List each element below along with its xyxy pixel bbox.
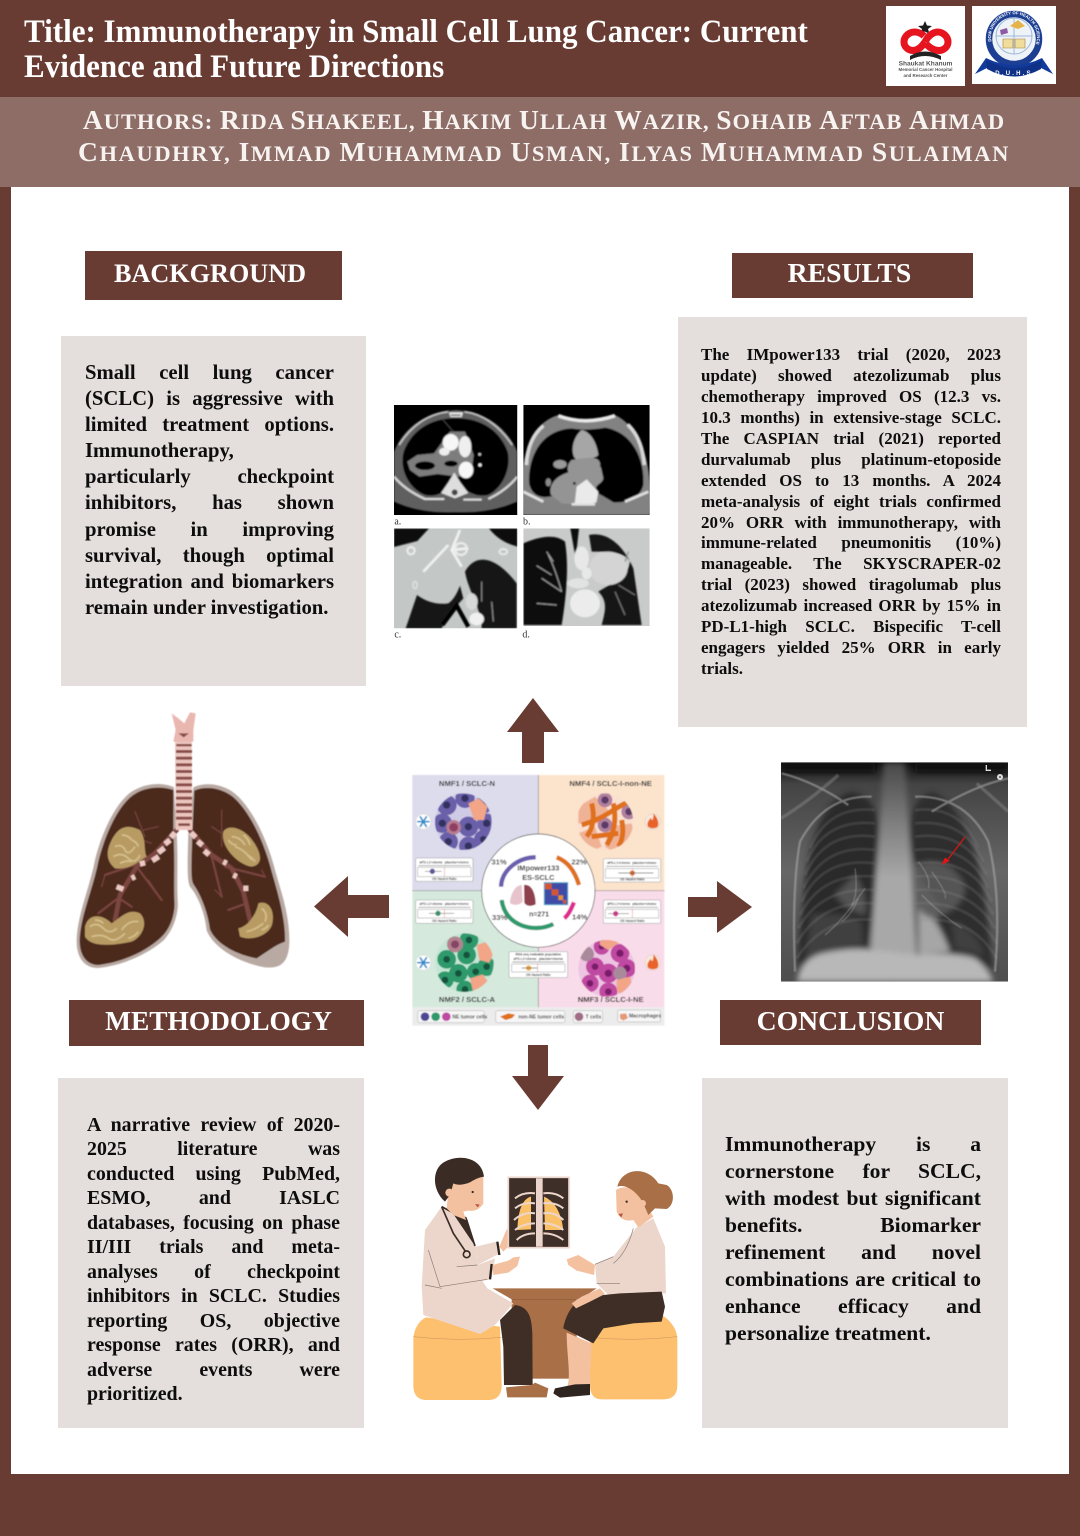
panel: methodology text: conducted using PubMed, [87,1163,340,1185]
panel: results text: trials. [701,659,743,678]
panel: background text: Immunotherapy, [85,440,234,462]
CT a [394,405,517,515]
figure: IMpower133 molecular subtypes: aPD-L1+chemo [514,957,537,961]
figure: IMpower133 molecular subtypes: OS Hazard Ratio [432,919,457,923]
subtype labels: NMF2 / SCLC-A [439,995,496,1004]
bronchi rings [117,833,248,889]
panel: results text: immune-related pneumonitis (10%) [701,533,1001,552]
figure: IMpower133 molecular subtypes: OS Hazard Ratio [432,877,457,881]
CT captions [394,516,530,641]
cell cluster NMF1 [434,792,492,850]
figure: lungs with tumours [76,712,290,968]
panel: conclusion text [702,1078,1008,1428]
logo: Shaukat Khanum: Shaukat Khanum [899,60,953,68]
panel: results text: 20% ORR with immunotherapy, with [701,512,1001,532]
panel: background text: integration and biomarkers [85,571,334,593]
frame: right side border [1069,187,1080,1536]
panel: conclusion text: Immunotherapy is a [725,1132,981,1156]
panel: background text: survival, though optimal [85,545,334,567]
panel: background text: limited treatment options. [85,414,334,436]
logo: Shaukat Khanum: and Research Center [904,73,948,78]
cell cluster NMF3 [578,940,636,998]
panel: conclusion text: cornerstone for SCLC, [725,1159,981,1183]
panel: methodology text: A narrative review of 2020- [87,1114,340,1136]
cell legend: Macrophages [629,1014,661,1020]
arrow: down [512,1045,564,1110]
panel: background text: Small cell lung cancer [85,362,334,384]
panel: results text: extended OS to 13 months. A 2024 [701,471,1001,490]
heading: conclusion [720,1000,981,1045]
center circle: ES-SCLC [522,873,555,882]
red arrow [942,837,965,865]
panel: methodology text: inhibitors in SCLC. Studies [87,1285,340,1307]
heading: methodology [69,1000,364,1046]
figure: IMpower133 molecular subtypes: placebo+chemo [632,861,656,865]
arrow: left [314,876,389,937]
CT b [522,405,650,515]
figure: doctor and patient consultation [413,1158,678,1400]
arrow: up [507,698,559,763]
panel: results text: meta-analysis of eight trials confirmed [701,492,1001,511]
logo: Shaukat Khanum [886,6,965,86]
cell cluster NMF4 [578,792,634,850]
panel: methodology text: 2025 literature was [87,1138,340,1160]
figure: IMpower133 molecular subtypes: RNA-seq evaluable population [516,952,561,956]
center circle: 31% [491,858,507,867]
CT d [523,528,650,626]
CT c [394,528,517,628]
panel: conclusion text: enhance efficacy and [725,1294,981,1318]
figure: IMpower133 molecular subtypes: OS Hazard Ratio [620,919,645,923]
authors band [0,97,1080,187]
center circle: 33% [492,913,508,922]
tumours [85,827,273,945]
authors: AUTHORS: RIDA SHAKEEL, HAKIM ULLAH WAZIR, SOHAIB AFTAB AHMAD [83,104,1005,135]
panel: background text: (SCLC) is aggressive with [85,388,334,410]
panel: methodology text: databases, focusing on phase [87,1212,340,1234]
frame: left side border [0,187,11,1536]
panel: conclusion text: combinations are critical to [725,1267,981,1291]
cell legend [418,1010,661,1023]
figure: IMpower133 molecular subtypes: OS Hazard Ratio [526,973,551,977]
center circle: 14% [572,912,588,921]
cell legend: T cells [586,1014,601,1020]
forest plots [416,858,661,978]
figure: IMpower133 molecular subtypes: aPD-L1+chemo [420,860,443,864]
title: Title: Immunotherapy in Small Cell Lung Cancer: Current [24,14,808,50]
heading: results [732,253,973,298]
table [493,1288,597,1379]
title [24,14,808,85]
authors: CHAUDHRY, IMMAD MUHAMMAD USMAN, ILYAS MUHAMMAD SULAIMAN [78,136,1010,167]
panel: results text: manageable. The SKYSCRAPER-02 [701,554,1001,573]
center circle [482,834,595,947]
panel: results text: trial (2023) showed tiragolumab plus [701,575,1001,594]
figure: IMpower133 molecular subtypes [412,774,665,1026]
figure: IMpower133 molecular subtypes: OS Hazard Ratio [620,878,645,882]
panel: results text: 10.3 months) in extensive-stage SCLC. [701,408,1001,427]
CT captions: b. [523,516,530,527]
panel: conclusion text: with modest but significant [725,1186,981,1210]
doctor [422,1158,548,1397]
panel: conclusion text: personalize treatment. [725,1321,931,1345]
figure: IMpower133 molecular subtypes: placebo+chemo [539,957,563,961]
arrow: right [688,881,752,933]
figure: IMpower133 molecular subtypes: aPD-L1+chemo [420,902,443,906]
panel: background text: inhibitors, has shown [85,492,334,514]
panel: background text: promise in improving [85,519,334,541]
frame: bottom band [0,1474,1080,1536]
panel: methodology text: adverse events were [87,1359,340,1381]
figure: chest x-ray with red arrow [781,762,1008,982]
CT captions: d. [522,630,530,641]
authors [78,104,1010,167]
panel: background text: particularly checkpoint [85,466,334,488]
panel: methodology text: II/III trials and meta- [87,1236,340,1258]
subtype labels: NMF1 / SCLC-N [439,779,496,788]
figure: IMpower133 molecular subtypes: placebo+chemo [445,860,469,864]
center circle: IMpower133 [517,864,559,873]
figure: IMpower133 molecular subtypes: placebo+chemo [632,902,656,906]
figure: IMpower133 molecular subtypes: aPD-L1+chemo [607,902,630,906]
heading: results: RESULTS [788,257,911,288]
subtype labels: NMF4 / SCLC-I-non-NE [569,779,652,788]
panel: methodology text: response rates (ORR), and [87,1334,340,1356]
figure: CT scan panels [394,405,650,641]
heading: background: BACKGROUND [114,259,306,288]
cell legend: NE tumor cells [452,1014,488,1020]
panel: results text [678,317,1027,727]
heading: methodology: METHODOLOGY [105,1006,332,1036]
panel: methodology text: ESMO, and IASLC [87,1187,340,1209]
panel: results text: update) showed atezolizumab plus [701,366,1001,385]
panel: results text: PD-L1-high SCLC. Bispecific T-cell [701,617,1001,636]
title: Evidence and Future Directions [24,49,444,85]
panel: conclusion text: benefits. Biomarker [725,1213,981,1237]
figure: IMpower133 molecular subtypes: aPD-L1+chemo [607,861,630,865]
logo: DUHS: D.U.H.S [995,71,1033,77]
logo: Shaukat Khanum: Memorial Cancer Hospital [899,67,952,72]
subtype labels: NMF3 / SCLC-I-NE [578,995,644,1004]
CT captions: a. [394,516,401,527]
panel: background text: remain under investigation. [85,597,328,619]
panel: results text: engagers yielded 25% ORR in early [701,638,1001,657]
header bar [0,0,1080,97]
panel: conclusion text: refinement and novel [725,1240,981,1264]
heading: background [85,251,342,300]
subtype labels [439,779,652,1004]
panel: background text [61,336,366,686]
cold / hot icons [416,813,660,970]
panel: results text: The CASPIAN trial (2021) reported [701,429,1001,448]
panel: methodology text: reporting OS, objective [87,1310,340,1332]
bronchial tree [98,810,265,920]
panel: methodology text [58,1078,364,1428]
patient [553,1171,673,1398]
logo: DUHS [972,6,1056,84]
stools [413,1316,677,1400]
panel: methodology text: prioritized. [87,1383,183,1405]
center circle: n=271 [529,912,549,919]
panel: results text: atezolizumab increased ORR by 15% in [701,596,1001,615]
right lung [188,784,289,968]
quadrant backgrounds [412,775,664,1026]
panel: results text: chemotherapy improved OS (12.3 vs. [701,387,1001,406]
trachea [172,712,196,830]
cell legend: non-NE tumor cells [518,1014,564,1020]
figure: IMpower133 molecular subtypes: placebo+chemo [445,902,469,906]
left lung [77,784,178,968]
panel: results text: The IMpower133 trial (2020, 2023 [701,345,1001,364]
CT captions: c. [394,630,401,641]
center circle: 22% [571,858,587,867]
heading: conclusion: CONCLUSION [757,1005,944,1036]
chest x-ray card [508,1177,569,1248]
panel: results text: durvalumab plus platinum-etoposide [701,450,1001,469]
panel: methodology text: analyses of checkpoint [87,1261,340,1283]
cell cluster NMF2 [435,932,495,997]
